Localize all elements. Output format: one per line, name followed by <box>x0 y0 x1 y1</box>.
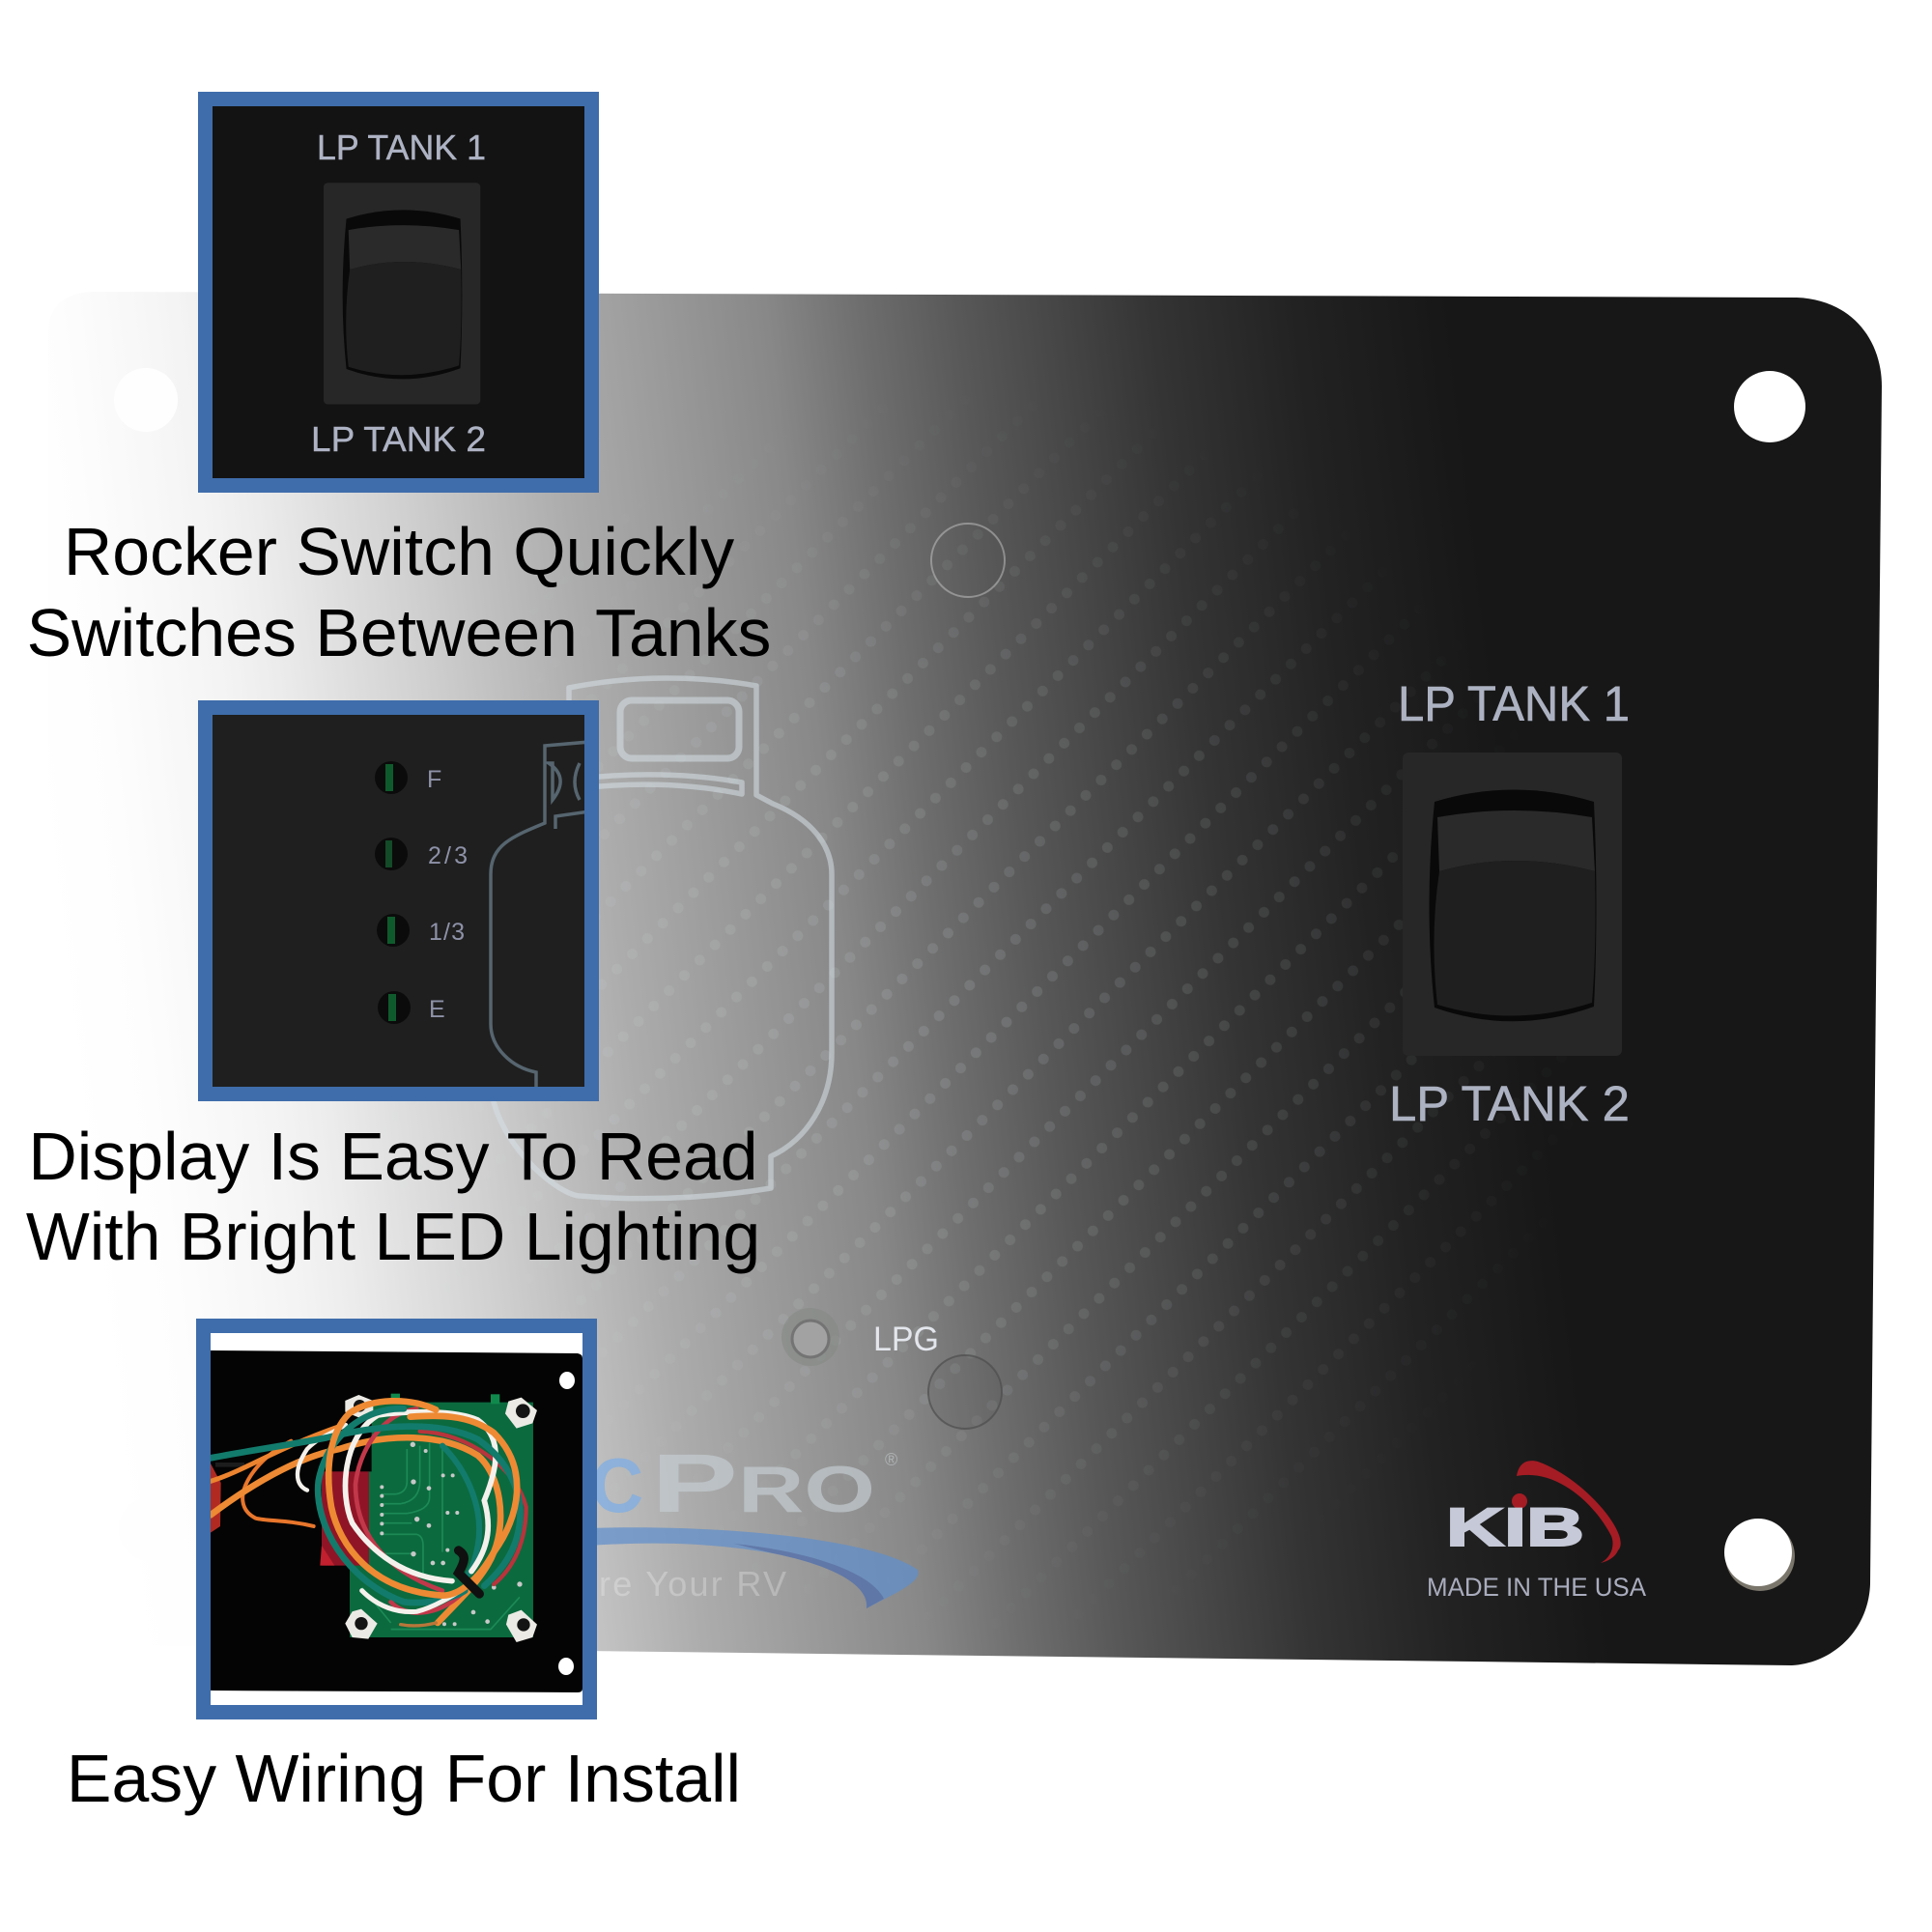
icon: LED one third <box>377 914 410 947</box>
nylon standoffs <box>345 1395 537 1642</box>
label: LP tank 1: LP TANK 1 <box>1398 676 1630 731</box>
panel: faded carbon fibre switch plate <box>48 290 1893 1671</box>
icon: upper mounting recess <box>931 524 1005 597</box>
panel: wiring detail photo <box>196 1319 597 1719</box>
circuit board <box>350 1394 533 1637</box>
caption: display: Display Is Easy To Read <box>28 1119 758 1194</box>
logo: KIB: KIB <box>1446 1496 1584 1557</box>
caption: rocker switch: Rocker Switch Quickly <box>64 514 734 589</box>
icon: top right mounting hole <box>1734 371 1805 442</box>
inset rocker switch <box>324 183 480 404</box>
logo: faded brand mark: re Your RV <box>599 1564 786 1604</box>
caption: display: With Bright LED Lighting <box>26 1199 760 1274</box>
caption: wiring: Easy Wiring For Install <box>67 1741 741 1816</box>
label: E: E <box>429 996 445 1023</box>
label: 2/3: 2/3 <box>428 842 468 869</box>
caption: rocker switch: Switches Between Tanks <box>27 595 771 670</box>
black back plate <box>211 1350 582 1692</box>
panel: LED display detail photo <box>198 700 599 1101</box>
logo: faded brand mark <box>589 1437 919 1608</box>
logo: faded brand mark: C <box>591 1442 643 1528</box>
icon: bottom left ghost hole <box>119 1497 183 1561</box>
wiring assembly in photo coordinates <box>211 1394 537 1642</box>
logo: KIB <box>1446 1461 1621 1563</box>
LPG label: LPG <box>873 1321 939 1358</box>
panel: rocker switch detail photo <box>198 92 599 493</box>
text: made in the USA: MADE IN THE USA <box>1427 1573 1646 1602</box>
label: inset LP tank 1: LP TANK 1 <box>317 128 486 167</box>
icon: tank outline on plate <box>491 678 832 1199</box>
label: LP tank 2: LP TANK 2 <box>1389 1076 1630 1131</box>
logo: faded brand mark: P <box>651 1437 738 1530</box>
icon: plate holes <box>558 1372 575 1675</box>
caption: rocker switch <box>27 514 771 670</box>
icon: inset tank outline <box>491 742 589 1087</box>
icon: bottom right mounting hole <box>1724 1519 1795 1591</box>
caption: display <box>26 1119 760 1274</box>
wiring bundle <box>211 1401 526 1626</box>
icon: LPG indicator LED <box>781 1308 839 1366</box>
red connector block <box>211 1463 369 1566</box>
label: F: F <box>427 766 441 793</box>
logo: faded brand mark: ® <box>885 1450 897 1469</box>
icon: LED full <box>375 761 408 794</box>
logo: faded brand mark: RO <box>738 1453 875 1526</box>
icon: lower mounting recess <box>928 1355 1002 1429</box>
icon: top left ghost hole <box>114 368 178 432</box>
rocker switch <box>1403 753 1622 1056</box>
label: 1/3: 1/3 <box>429 919 465 946</box>
icon: LED two thirds <box>375 838 408 870</box>
label: inset LP tank 2: LP TANK 2 <box>311 419 486 459</box>
icon: LED empty <box>378 991 411 1024</box>
